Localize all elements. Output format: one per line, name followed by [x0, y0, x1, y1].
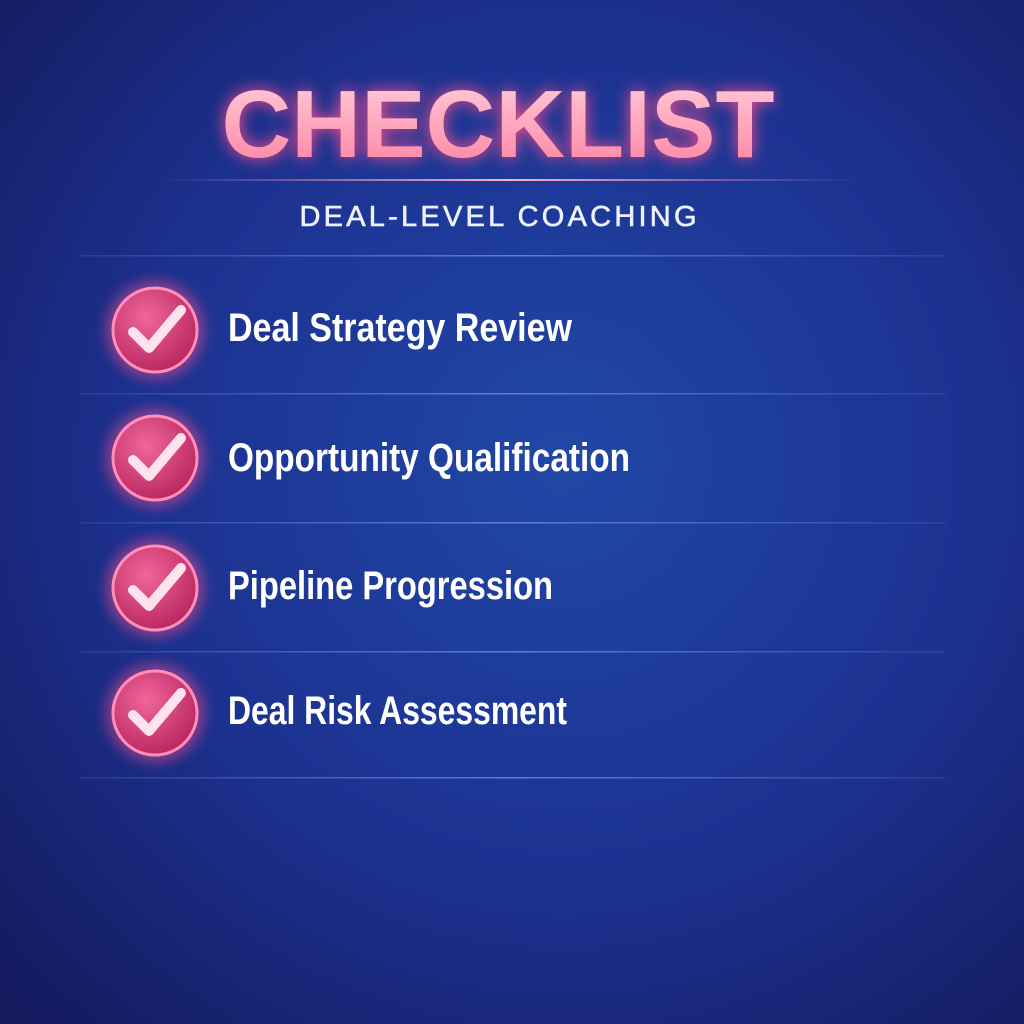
- item 1: [105, 280, 573, 380]
- item 3: Pipeline Progression: [228, 564, 553, 608]
- title: CHECKLIST: [222, 71, 774, 178]
- item 2: [105, 408, 630, 508]
- subtitle: DEAL-LEVEL COACHING: [300, 201, 696, 233]
- title: CHECKLIST: [222, 71, 774, 178]
- item 4: [105, 663, 567, 763]
- item 1: Deal Strategy Review: [228, 306, 573, 350]
- item 3: [105, 538, 553, 638]
- item 2: Opportunity Qualification: [228, 436, 630, 480]
- item 4: Deal Risk Assessment: [228, 689, 567, 733]
